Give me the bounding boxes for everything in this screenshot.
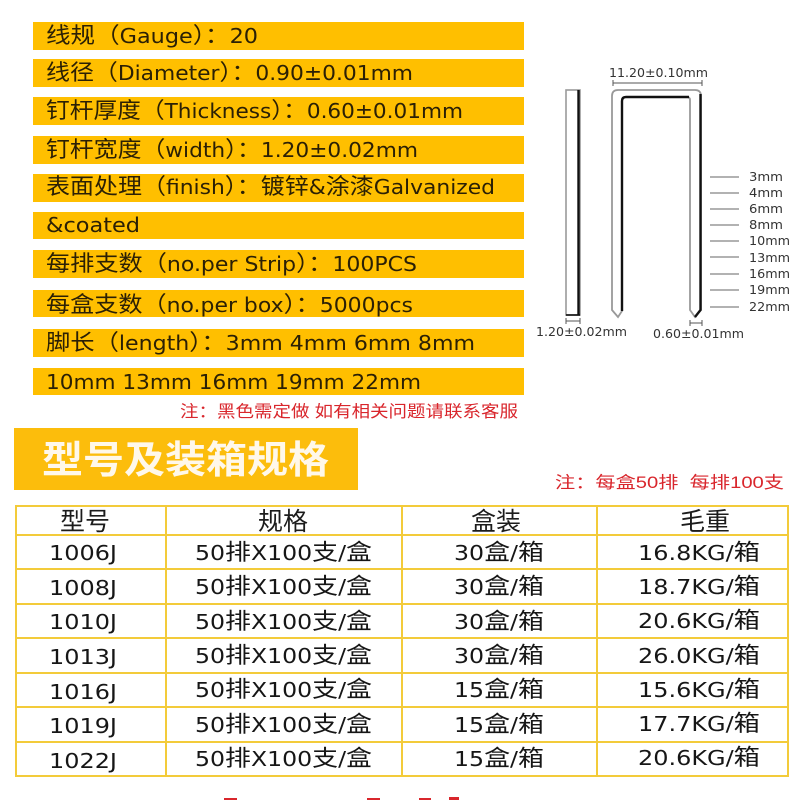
row: 1013J: 30盒/箱 [454,643,544,669]
row: 1019J: 1019J [49,714,117,738]
row: 1013J: 50排X100 支/盒 [195,643,372,669]
note: packing count: 注：每盒50排 每排100支 [555,473,784,492]
spec row: thickness: 钉杆厚度（ Thickness ）：0.60±0.01mm [46,99,463,124]
table header row [60,502,730,538]
spec row: number per box [33,290,524,318]
table header row: 型号 [60,502,110,538]
row: 1010J: 1010J [49,610,117,634]
row: 1008J [49,574,760,600]
leg length scale: 6mm [749,202,783,216]
leg length scale: 13mm [749,251,790,265]
dimension: staple thickness: 0.60±0.01mm [653,327,744,341]
table: models and packing [16,502,788,776]
row: 1010J: 30盒/箱 [454,609,544,635]
spec row: number per strip: 每排支数（ no.per Strip ）：100PCS [46,252,417,277]
spec row: number per strip [33,250,524,278]
row: 1008J: 30盒/箱 [454,574,544,600]
spec row: diameter: 线径（ Diameter ）：0.90±0.01mm [46,61,413,86]
table grid [16,506,788,776]
row: 1016J [49,677,760,704]
row: 1013J [49,643,760,669]
row: 1010J [49,608,760,635]
row: 1010J: 20.6KG/ 箱 [638,608,760,634]
dimension: staple width [536,318,627,339]
row: 1016J: 15盒/箱 [454,677,544,703]
row: 1010J: 50排X100 支/盒 [195,609,372,635]
row: 1006J: 50排X100 支/盒 [195,540,372,566]
row: 1008J: 18.7KG/ 箱 [638,574,760,600]
spec row: finish continued: &coated [46,213,140,237]
leg length scale: 19mm [749,283,790,297]
diagram: staple dimensions [536,66,790,341]
heading: model and packing specification: 型号及装箱规格 [42,440,329,482]
note: black finish made to order: 注：黑色需定做 如有相关问题请联系客服 [180,402,518,421]
row: 1022J: 1022J [49,749,117,773]
spec row: finish continued [33,212,524,239]
spec row: width: 钉杆宽度（ width）：1.20±0.02mm [46,138,418,163]
spec row: diameter [33,59,524,87]
spec row: gauge [33,22,524,50]
row: 1006J: 1006J [49,541,117,565]
row: 1016J: 50排X100 支/盒 [195,677,372,703]
leg length scale: 3mm [749,170,783,184]
row: 1016J: 15.6KG/ 箱 [638,677,760,703]
dimension: staple thickness [653,320,744,341]
table header row: 规格 [258,502,308,538]
leg length scale: 10mm [749,234,790,248]
row: 1006J: 30盒/箱 [454,540,544,566]
dimension: staple crown width [609,66,708,86]
leg length scale: 16mm [749,267,790,281]
staple front view [612,90,701,317]
spec row: length: 脚长（ length ）：3mm 4mm 6mm 8mm [46,331,475,356]
heading: model and packing specification [14,428,358,490]
spec row: number per box: 每盒支数（ no.per box ）：5000pcs [46,293,413,318]
row: 1022J: 15盒/箱 [454,746,544,772]
row: 1022J: 20.6KG/ 箱 [638,745,760,771]
spec row: length continued [33,368,524,395]
staple side view [566,90,580,315]
spec row: width [33,136,524,164]
row: 1008J: 1008J [49,576,117,600]
row: 1013J: 26.0KG/ 箱 [638,643,760,669]
row: 1013J: 1013J [49,645,117,669]
row: 1008J: 50排X100 支/盒 [195,574,372,600]
row: 1022J: 50排X100 支/盒 [195,746,372,772]
row: 1016J: 1016J [49,680,117,704]
table header row: 毛重 [680,502,730,538]
dimension: staple width: 1.20±0.02mm [536,325,627,339]
row: 1019J [49,711,760,738]
panel: specification list [33,22,524,395]
leg length scale: 22mm [749,300,790,314]
leg length scale: 8mm [749,218,783,232]
spec row: finish: 表面处理（ finish）：镀锌 &涂漆Galvanized [46,175,495,200]
leg length scale: 4mm [749,186,783,200]
row: 1022J [49,745,760,773]
spec row: gauge: 线规（ Gauge ）：20 [46,24,258,49]
table header row: 盒装 [471,502,521,538]
spec row: length continued: 10mm 13mm 16mm 19mm 22mm [46,370,421,394]
cropped red text fragments at bottom edge [224,797,459,800]
row: 1006J: 16.8KG/ 箱 [638,540,760,566]
row: 1019J: 50排X100 支/盒 [195,712,372,738]
leg length scale [710,170,790,314]
row: 1019J: 17.7KG/ 箱 [638,711,760,737]
row: 1006J [49,540,760,566]
row: 1019J: 15盒/箱 [454,712,544,738]
dimension: staple crown width: 11.20±0.10mm [609,66,708,80]
